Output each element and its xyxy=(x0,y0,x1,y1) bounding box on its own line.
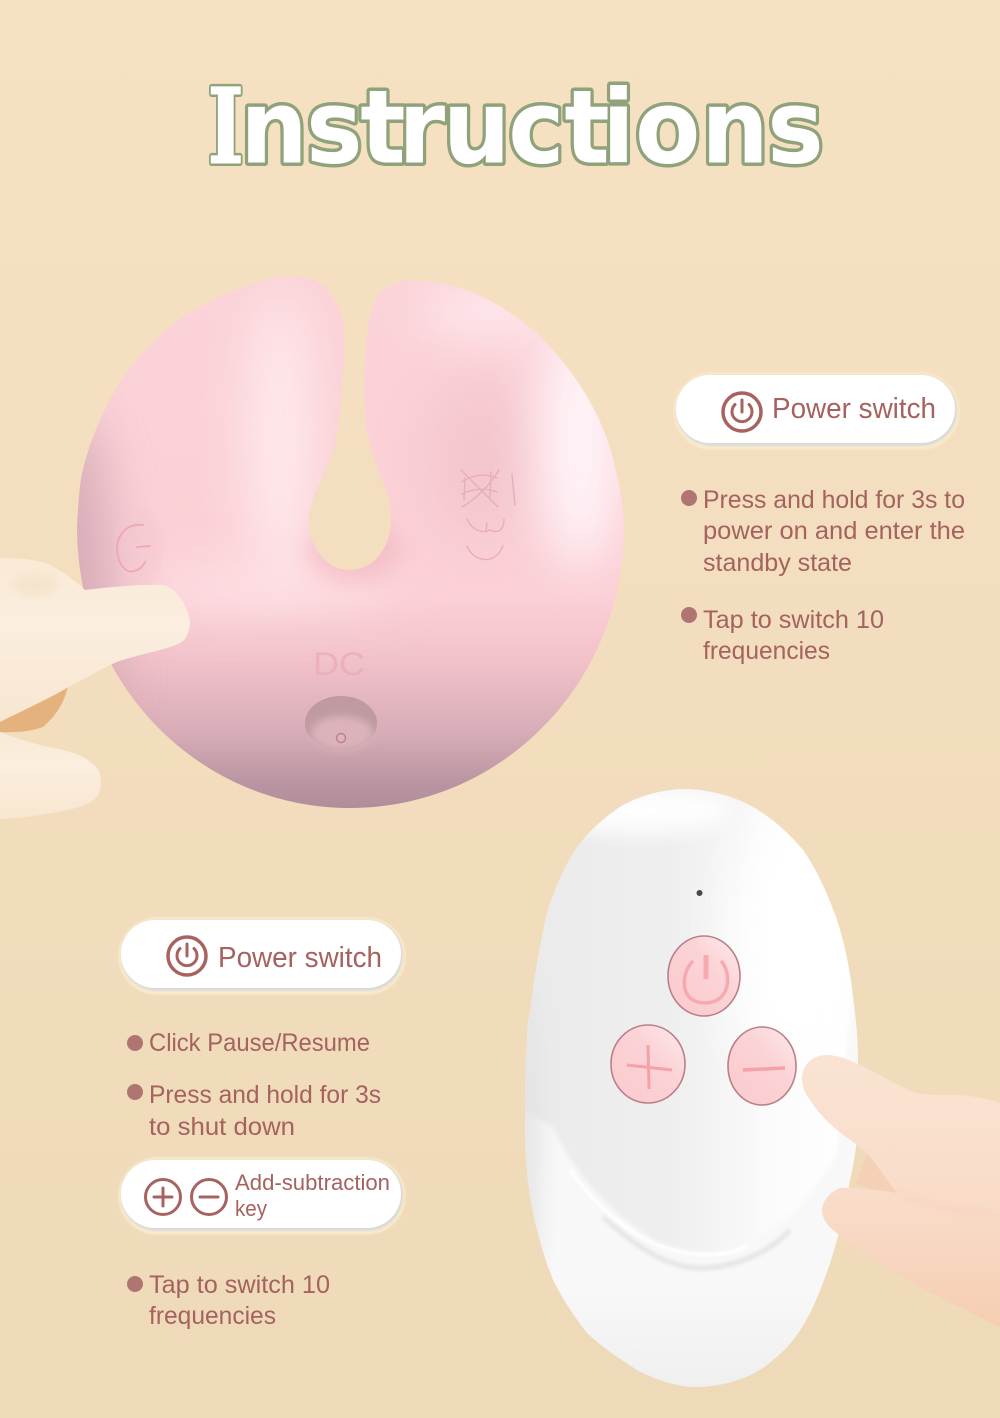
text block: power instructions: power on and enter the xyxy=(703,517,965,545)
embossed power mark xyxy=(117,508,162,588)
right hand xyxy=(802,1055,1000,1327)
embossed symbols xyxy=(461,470,515,560)
button: power xyxy=(668,936,740,1016)
title: I xyxy=(208,66,244,188)
text block: pause and shut down: to shut down xyxy=(149,1113,295,1141)
title: I xyxy=(208,66,244,188)
icon: power xyxy=(168,937,206,975)
text block: power instructions: Press and hold for 3s to xyxy=(703,486,965,514)
pill: power switch left: Power switch xyxy=(218,942,382,974)
left hand xyxy=(0,558,190,819)
indicator light xyxy=(696,890,702,896)
pink device xyxy=(77,276,624,808)
pill: add-subtraction key: key xyxy=(235,1196,267,1221)
pill: add-subtraction key xyxy=(118,1158,406,1234)
text block: pause and shut down: Press and hold for 3s xyxy=(149,1081,381,1109)
text block: power instructions: Tap to switch 10 xyxy=(703,606,884,634)
title: nstructions xyxy=(240,69,824,187)
pill: power switch right: Power switch xyxy=(772,393,936,425)
text block: tap to switch: Tap to switch 10 xyxy=(149,1271,330,1299)
button: plus xyxy=(611,1025,685,1103)
button: minus xyxy=(728,1027,796,1105)
icon: plus xyxy=(146,1180,180,1214)
pill: power switch left xyxy=(118,918,406,994)
text block: power instructions xyxy=(681,486,965,665)
remote control xyxy=(500,780,898,1387)
pill: add-subtraction key: Add-subtraction xyxy=(235,1170,390,1195)
text block: tap to switch: frequencies xyxy=(149,1302,276,1330)
DC label: DC xyxy=(313,646,365,682)
charging port xyxy=(305,696,377,750)
icon: minus xyxy=(192,1180,226,1214)
icon: power xyxy=(723,393,761,431)
text block: power instructions: standby state xyxy=(703,549,852,577)
text block: pause and shut down xyxy=(127,1029,381,1141)
pill: power switch right xyxy=(674,372,960,450)
text block: pause and shut down: Click Pause/Resume xyxy=(149,1029,370,1057)
text block: power instructions: frequencies xyxy=(703,637,830,665)
text block: tap to switch xyxy=(127,1271,330,1330)
title: nstructions xyxy=(240,69,824,187)
